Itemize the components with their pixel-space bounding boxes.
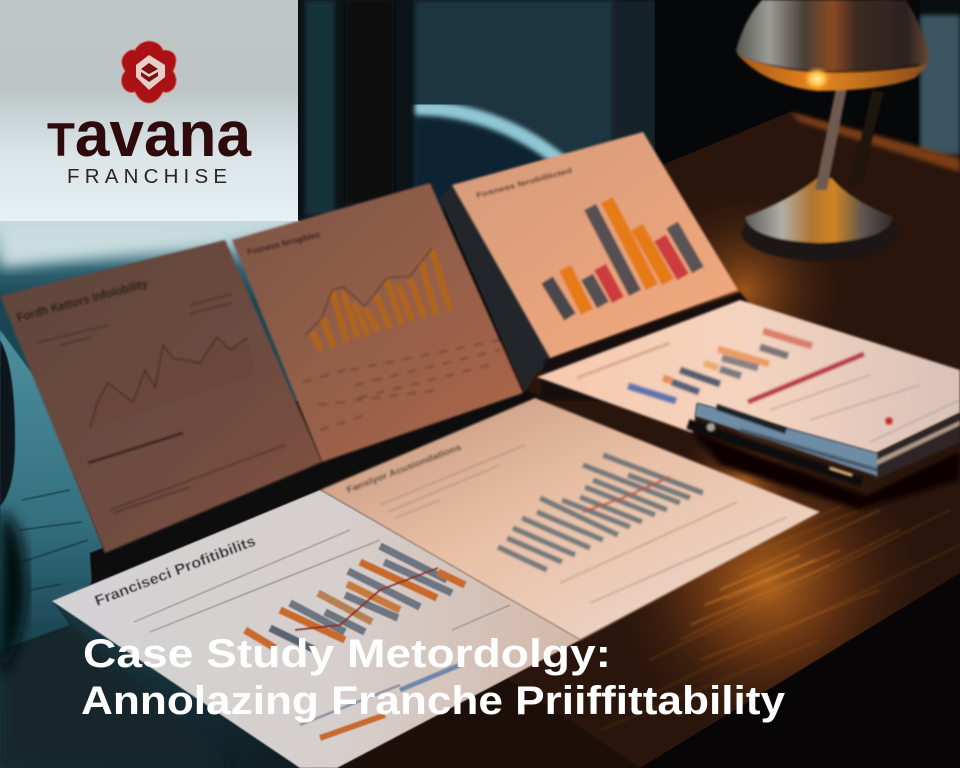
lamp stem <box>815 88 847 190</box>
brand subtitle: FRANCHISE <box>67 165 227 188</box>
card: middle bar chart <box>232 183 523 462</box>
mug at left edge <box>0 340 27 680</box>
orange bars <box>312 250 450 350</box>
stack right side <box>874 413 960 480</box>
red trend line <box>295 568 438 630</box>
card: lower right report <box>320 398 820 640</box>
card heading: Fosness ferogibles <box>246 229 322 257</box>
card: right flat report <box>537 300 960 453</box>
paper stack and pen <box>688 403 960 510</box>
title <box>81 632 786 723</box>
stack shadow <box>690 430 960 510</box>
brand name: Tavana <box>47 98 251 170</box>
card: left line chart <box>0 240 322 553</box>
mixed bars <box>245 546 465 738</box>
card: lower left profitability report <box>52 490 580 768</box>
mug shadow <box>0 510 27 680</box>
title: Case Study Metordolgy: <box>83 632 611 676</box>
bulb glow <box>803 67 831 91</box>
text lines <box>134 530 510 632</box>
card heading: Fordh Kettors Infolobility <box>15 276 149 325</box>
lamp base <box>742 178 898 261</box>
shadow under the top and right cards <box>540 292 748 400</box>
red trend line <box>583 477 670 512</box>
data table <box>303 340 500 430</box>
grey bars <box>498 455 703 570</box>
card: top bar chart <box>452 132 738 358</box>
horizontal bars <box>577 331 864 402</box>
desk lamp <box>736 0 930 261</box>
stack blue edge <box>695 403 877 476</box>
glowing rim <box>738 55 929 91</box>
text lines <box>380 445 787 603</box>
title: Annolazing Franche Priiffittability <box>81 679 786 723</box>
bars <box>547 200 698 317</box>
line chart <box>90 337 256 428</box>
teal wood panel <box>0 330 105 650</box>
card heading: Franciseci Profitibilits <box>93 534 258 610</box>
logo panel <box>0 0 298 221</box>
wood grain highlights <box>600 450 960 730</box>
stack dark slot <box>716 404 787 434</box>
lamp shade <box>736 0 930 71</box>
card heading: Fanslyor Acusiondations <box>345 442 463 495</box>
pen <box>688 423 862 482</box>
chart sub-heading <box>88 433 183 463</box>
logo icon <box>121 41 176 103</box>
dark gap strip next to the top card <box>440 186 556 392</box>
card heading: Fosness ferobilitcted <box>475 165 574 200</box>
shadow behind the upper cards <box>90 390 545 586</box>
